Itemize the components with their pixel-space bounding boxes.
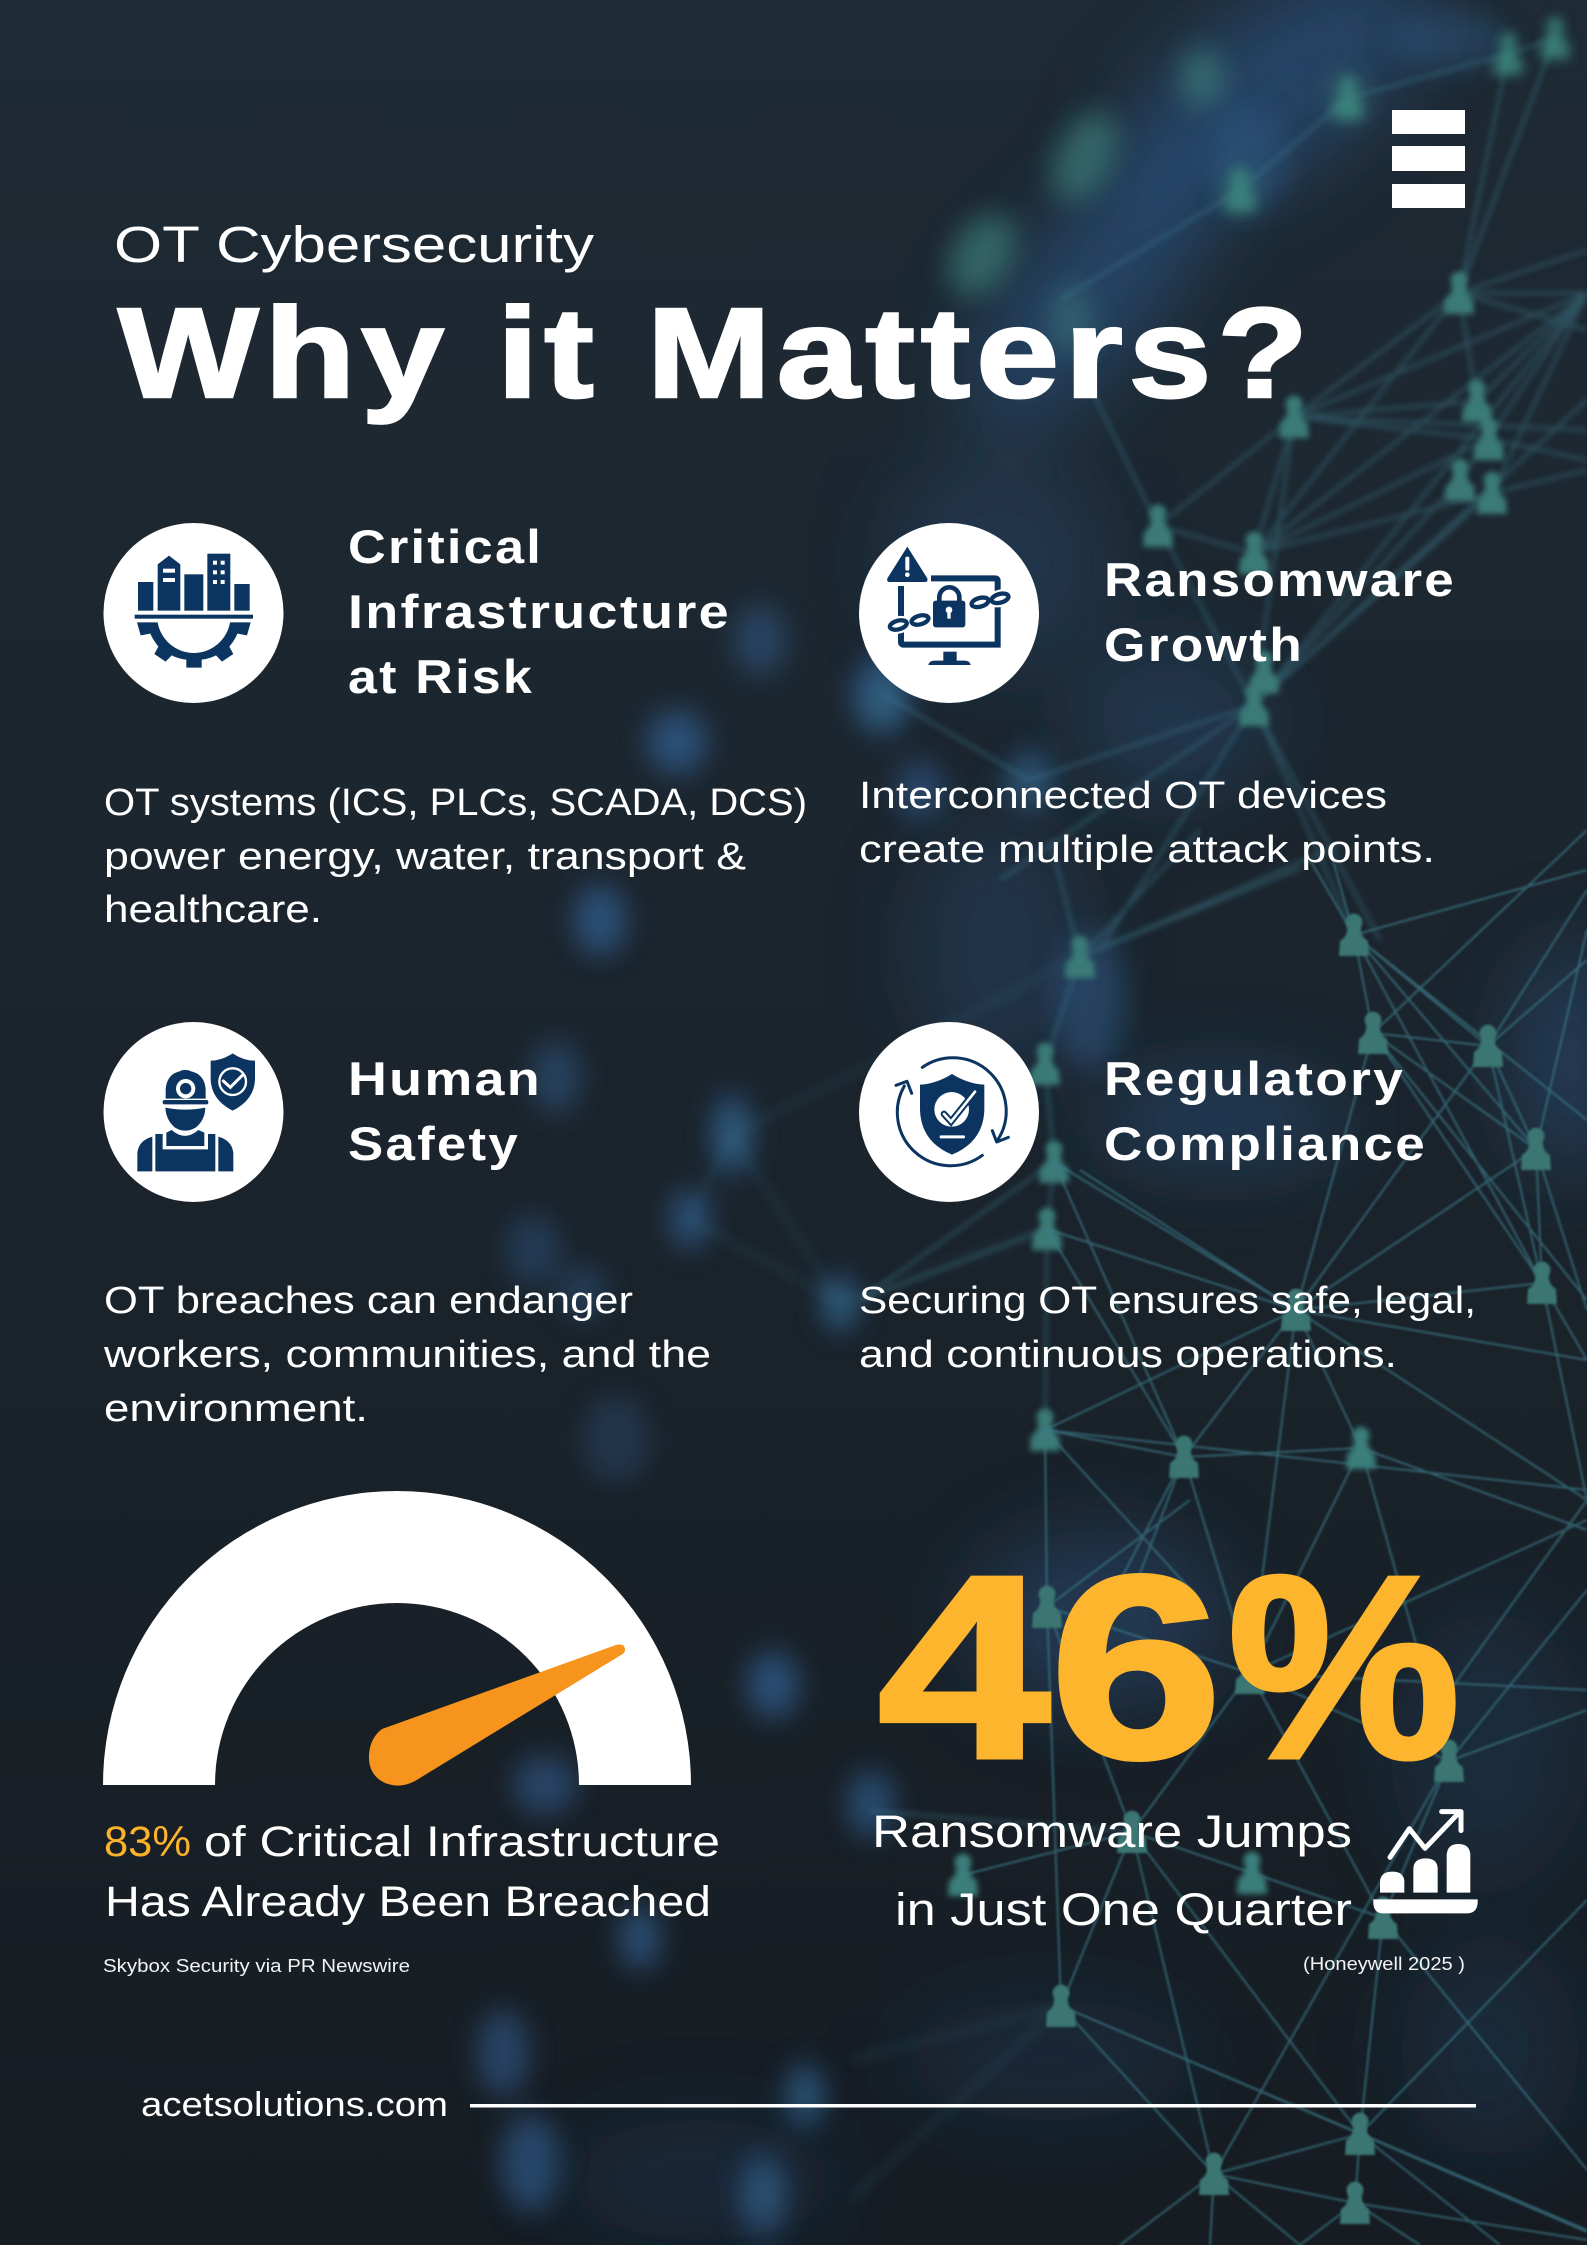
subtitle: OT Cybersecurity [114, 216, 595, 273]
body text: healthcare. [104, 889, 322, 931]
gauge chart [103, 1491, 691, 1786]
heading: Growth [1104, 618, 1304, 671]
body text: environment. [104, 1388, 368, 1430]
body text: workers, communities, and the [103, 1334, 711, 1376]
faint far lines [690, 957, 1080, 2200]
panel: ransomware growth [859, 523, 1456, 871]
logo mark [1392, 110, 1465, 208]
heading [348, 1052, 542, 1170]
gauge caption: Has Already Been Breached [105, 1878, 711, 1926]
icon: growth chart [1373, 1809, 1478, 1914]
sharp lines [963, 830, 1587, 2245]
gauge caption [104, 1818, 720, 1926]
gauge needle [369, 1645, 625, 1786]
footer website: acetsolutions.com [141, 2086, 448, 2124]
blurred teal glows [724, 48, 1362, 2211]
heading [1104, 553, 1456, 671]
heading: Compliance [1104, 1117, 1427, 1170]
heading [348, 520, 731, 703]
source: skybox: Skybox Security via PR Newswire [103, 1956, 410, 1976]
soft lines [860, 38, 1587, 1832]
source: honeywell: (Honeywell 2025 ) [1303, 1954, 1465, 1974]
body text [859, 1280, 1476, 1376]
big stat 46% [878, 1523, 1460, 1813]
body text: create multiple attack points. [859, 829, 1435, 871]
gauge caption: 83% [104, 1818, 191, 1866]
heading: Safety [348, 1117, 520, 1170]
heading: at Risk [348, 650, 534, 703]
body text: Interconnected OT devices [859, 775, 1387, 817]
big stat 46%: % [1228, 1523, 1460, 1813]
icon: shield with cycle arrows [859, 1022, 1039, 1202]
heading [1104, 1052, 1427, 1170]
heading: Critical [348, 520, 543, 573]
body text: Securing OT ensures safe, legal, [859, 1280, 1476, 1322]
body text [859, 775, 1435, 871]
heading: Human [348, 1052, 542, 1105]
stat caption [872, 1806, 1352, 1935]
gauge caption: of Critical Infrastructure [204, 1818, 720, 1866]
stat caption: Ransomware Jumps [872, 1806, 1352, 1857]
heading: Infrastructure [348, 585, 731, 638]
big stat 46%: 46 [878, 1523, 1222, 1813]
body text: power energy, water, transport & [104, 836, 746, 878]
blurred far nodes [477, 10, 1510, 2239]
icon: worker with shield [104, 1022, 284, 1202]
body text: OT breaches can endanger [104, 1280, 633, 1322]
body text [103, 1280, 711, 1430]
haze [560, 0, 1587, 2240]
sharp nodes [1032, 914, 1557, 2224]
panel: critical infrastructure [104, 520, 807, 931]
icon: locked monitor [859, 523, 1039, 703]
body text: and continuous operations. [859, 1334, 1397, 1376]
panel: human safety [103, 1022, 711, 1430]
mid nodes [1225, 17, 1570, 211]
heading: Regulatory [1104, 1052, 1405, 1105]
body text [104, 782, 807, 931]
panel: regulatory compliance [859, 1022, 1476, 1376]
title: Why it Matters? [118, 282, 1314, 425]
heading: Ransomware [1104, 553, 1456, 606]
stat caption: in Just One Quarter [895, 1884, 1352, 1935]
icon: city on gear [104, 523, 284, 703]
body text: OT systems (ICS, PLCs, SCADA, DCS) [104, 782, 807, 824]
